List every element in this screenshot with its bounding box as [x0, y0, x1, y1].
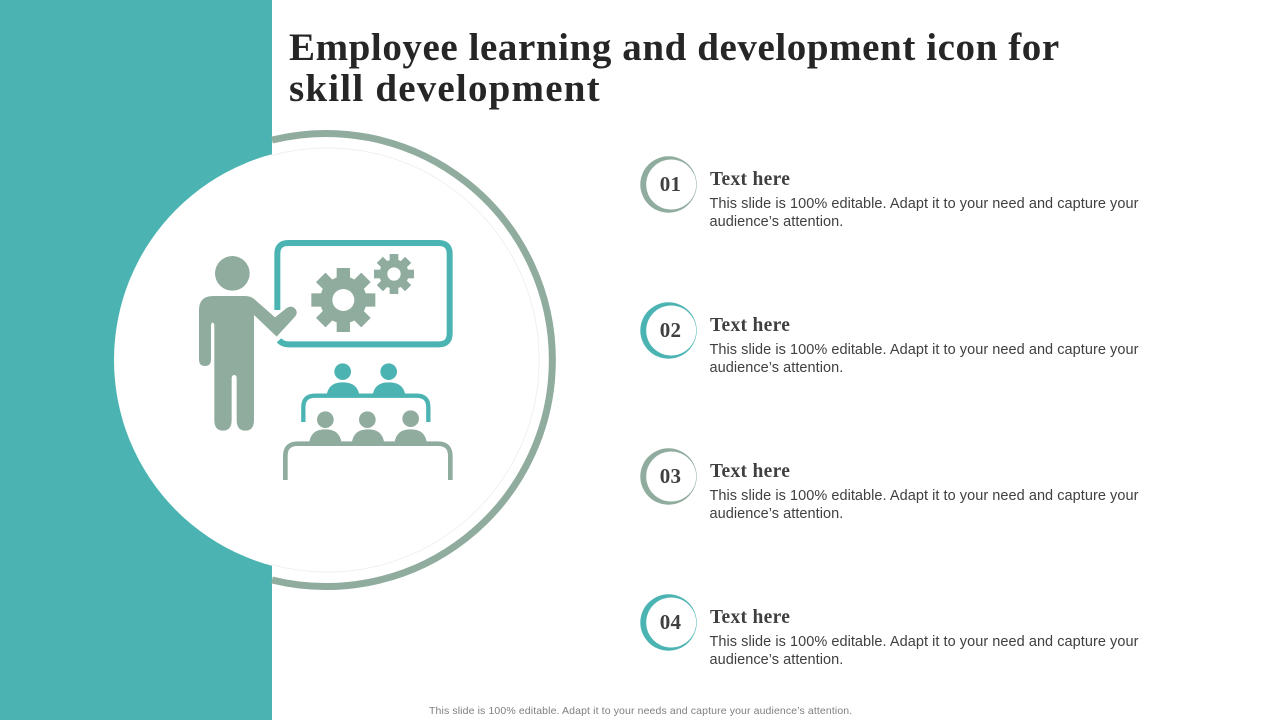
number badge 01 [640, 156, 697, 213]
list item 01 [640, 156, 1138, 230]
icon: presentation board [277, 243, 450, 344]
title [289, 26, 1060, 110]
icon: presenter figure [199, 256, 297, 431]
description 02: audience’s attention. [710, 360, 843, 376]
number badge 02: 02 [660, 318, 681, 342]
heading 03: Text here [710, 461, 790, 482]
heading 01: Text here [710, 169, 790, 190]
number badge 04 [640, 594, 697, 651]
white disc [114, 147, 540, 573]
description 02: This slide is 100% editable. Adapt it to your need and capture your [710, 342, 1138, 358]
outer ring [272, 134, 552, 587]
list item 02 [640, 302, 1138, 376]
heading 04: Text here [710, 607, 790, 628]
description 03: audience’s attention. [710, 506, 843, 522]
icon: front row audience [285, 410, 450, 480]
number badge 03: 03 [660, 464, 681, 488]
description 01: audience’s attention. [710, 214, 843, 230]
footer note: This slide is 100% editable. Adapt it to your needs and capture your audience’s attention. [429, 705, 852, 717]
title: Employee learning and development icon for [289, 26, 1060, 69]
description 04: audience’s attention. [710, 652, 843, 668]
number badge 04: 04 [660, 610, 681, 634]
list item 04 [640, 594, 1138, 668]
description 03: This slide is 100% editable. Adapt it to your need and capture your [710, 488, 1138, 504]
description 04 [710, 634, 1138, 668]
description 03 [710, 488, 1138, 522]
number badge 02 [640, 302, 697, 359]
description 02 [710, 342, 1138, 376]
heading 02: Text here [710, 315, 790, 336]
icon: back row audience [303, 363, 428, 422]
number badge 01: 01 [660, 172, 681, 196]
number badge 03 [640, 448, 697, 505]
teal side panel [0, 0, 272, 720]
description 04: This slide is 100% editable. Adapt it to your need and capture your [710, 634, 1138, 650]
description 01: This slide is 100% editable. Adapt it to your need and capture your [710, 196, 1138, 212]
title: skill development [289, 67, 601, 110]
icon: trainer presenting to audience [199, 243, 450, 480]
icon: large gear [311, 268, 375, 332]
icon: small gear [374, 254, 414, 294]
description 01 [710, 196, 1138, 230]
list item 03 [640, 448, 1138, 522]
